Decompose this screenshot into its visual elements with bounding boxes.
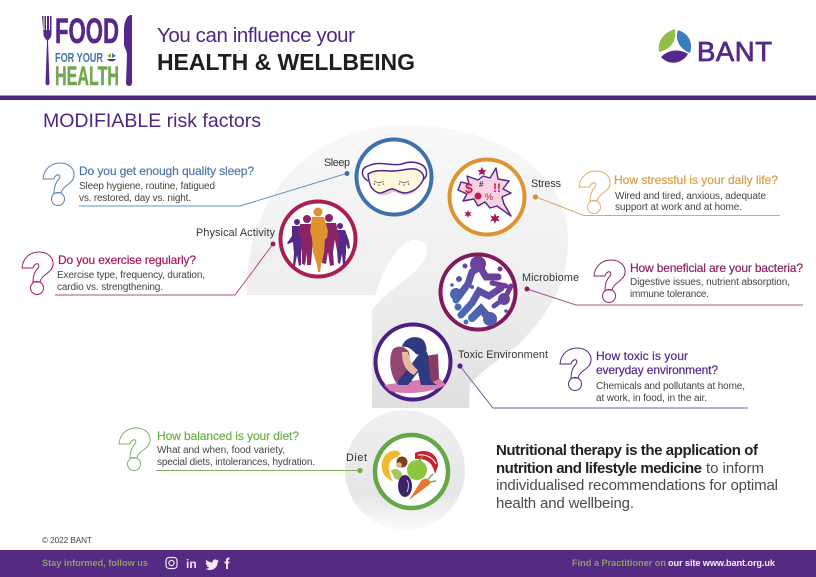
panel: exercise question: Physical Activity <box>196 227 276 239</box>
text block: nutritional therapy: Nutritional therapy is the application of <box>496 442 759 459</box>
panel: sleep question: Sleep hygiene, routine, fatigued <box>79 181 215 192</box>
panel: microbiome question: Digestive issues, nutrient absorption, <box>630 277 790 288</box>
footer bar: Stay informed, follow us <box>42 558 148 568</box>
header heading: HEALTH & WELLBEING <box>157 49 415 75</box>
icon: runners <box>287 208 350 272</box>
icon: question mark <box>43 163 74 206</box>
panel: stress question: How stressful is your daily life? <box>614 173 778 187</box>
header rule <box>0 96 816 100</box>
panel: diet question: What and when, food variety, <box>157 445 285 456</box>
footer bar <box>0 550 816 577</box>
logo: Food for your Health <box>42 12 132 91</box>
panel: diet question <box>119 428 367 473</box>
icon: speech burst <box>458 167 511 224</box>
logo: BANT <box>659 29 772 67</box>
icon: small tri-leaf <box>107 53 116 61</box>
panel: sleep icon <box>356 140 432 214</box>
header heading: You can influence your <box>157 24 355 47</box>
panel: toxic environment question: Chemicals and pollutants at home, <box>596 381 745 392</box>
panel: stress question <box>531 171 780 216</box>
text block: nutritional therapy <box>496 442 778 512</box>
logo: Food for your Health: HEALTH <box>55 61 119 91</box>
icon: sad seated figure <box>384 337 446 393</box>
panel: sleep question: vs. restored, day vs. night. <box>79 193 191 204</box>
panel: toxic environment icon <box>376 324 450 400</box>
icon: bacteria blobs <box>450 256 511 326</box>
icon: speech burst: # <box>479 180 484 189</box>
icon: linkedin: in <box>186 557 197 571</box>
panel: diet question: special diets, intolerances, hydration. <box>157 457 315 468</box>
panel: stress question: support at work and at home. <box>615 202 742 213</box>
icon: facebook <box>224 557 230 569</box>
text block: nutritional therapy: to inform <box>706 460 764 477</box>
text block: nutritional therapy: nutrition and lifestyle medicine <box>496 460 702 477</box>
large grey question mark <box>247 125 568 530</box>
icon: question mark <box>22 252 53 294</box>
panel: toxic environment question: everyday environment? <box>596 363 718 377</box>
icon: fork <box>42 16 52 85</box>
copyright: © 2022 BANT <box>42 536 92 545</box>
panel: microbiome question: Microbiome <box>522 272 579 284</box>
panel: microbiome icon <box>440 254 516 330</box>
panel: exercise question: Exercise type, frequency, duration, <box>57 270 205 281</box>
icon: speech burst: $ <box>465 180 473 196</box>
icon: instagram <box>166 558 177 568</box>
panel: diet question: How balanced is your diet? <box>157 429 299 443</box>
panel: physical activity icon <box>280 202 356 276</box>
panel: diet icon <box>375 435 448 508</box>
panel: exercise question: Do you exercise regularly? <box>58 253 196 267</box>
panel: toxic environment question: Toxic Environment <box>458 349 548 361</box>
logo: Food for your Health: FOR YOUR <box>55 50 103 65</box>
icon: speech burst: % <box>485 192 493 202</box>
icon: fruit and vegetables heart <box>382 450 438 500</box>
panel: sleep question: Sleep <box>324 157 350 169</box>
header heading <box>157 24 415 75</box>
panel: toxic environment question <box>457 348 748 408</box>
panel: microbiome question: How beneficial are your bacteria? <box>630 261 803 275</box>
icon: question mark <box>579 171 610 214</box>
icon: question mark <box>119 428 150 470</box>
icon: twitter <box>206 559 219 570</box>
panel: stress question: Wired and tired, anxious, adequate <box>615 191 766 202</box>
icon: knife <box>124 15 132 86</box>
icon: sleep mask <box>362 162 427 195</box>
panel: exercise question: cardio vs. strengthening. <box>57 282 163 293</box>
panel: exercise question <box>22 227 276 295</box>
panel: microbiome question <box>522 260 803 305</box>
logo: Food for your Health: FOOD <box>55 12 119 51</box>
panel: stress icon <box>450 160 524 234</box>
panel: sleep question <box>43 157 350 206</box>
panel: sleep question: Do you get enough quality sleep? <box>79 164 254 178</box>
text block: nutritional therapy: health and wellbeing. <box>496 495 634 512</box>
icon: speech burst: !! <box>493 181 501 195</box>
icon: question mark <box>560 348 591 390</box>
logo: BANT: BANT <box>697 36 772 67</box>
panel: microbiome question: immune tolerance. <box>630 289 709 300</box>
footer bar: our site www.bant.org.uk <box>668 558 776 568</box>
panel: diet question: Diet <box>346 452 367 464</box>
icon: question mark <box>594 260 625 302</box>
footer bar: Find a Practitioner on <box>572 558 666 568</box>
panel: stress question: Stress <box>531 178 562 190</box>
panel: toxic environment question: How toxic is your <box>596 349 688 363</box>
section heading: MODIFIABLE risk factors <box>43 110 261 132</box>
text block: nutritional therapy: individualised recommendations for optimal <box>496 477 778 494</box>
panel: toxic environment question: at work, in food, in the air. <box>596 393 707 404</box>
